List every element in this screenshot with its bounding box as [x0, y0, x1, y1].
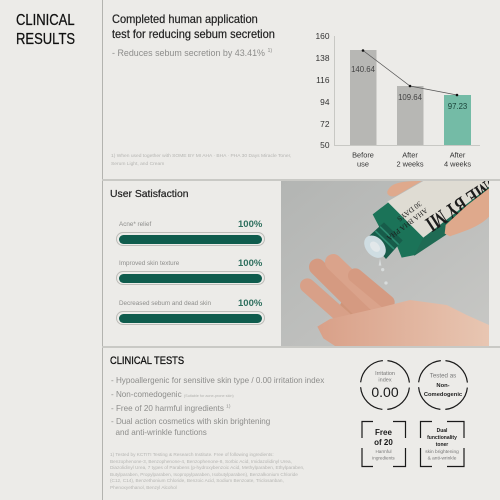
x axis labels: Before	[352, 150, 374, 160]
list: claims: - Hypoallergenic for sensitive skin type / 0.00 irritation index	[111, 376, 324, 385]
x axis labels: 4 weeks	[444, 160, 471, 168]
badge: free of 20: Free	[375, 428, 392, 437]
heading: human application test	[112, 13, 275, 41]
meter: decreased sebum	[116, 298, 265, 325]
x axis labels: 2 weeks	[396, 160, 424, 168]
meter: decreased sebum: Decreased sebum and dead skin	[119, 300, 211, 307]
title: clinical results: RESULTS	[16, 30, 75, 48]
meter: decreased sebum: 100%	[238, 298, 262, 309]
bar values: 109.64	[398, 93, 423, 102]
badge: free of 20: ingredients	[372, 456, 395, 460]
footnote: test details: Benzophenone-3, Benzophenone-4, Benzophenone-8, Sorbic Acid, Imidazolidinyl Urea,	[110, 458, 292, 464]
bars	[350, 50, 471, 145]
badge: dual functionality: skin brightening	[425, 449, 459, 455]
meter: improved skin texture	[116, 258, 265, 285]
badge: dual functionality: & anti-wrinkle	[428, 456, 457, 462]
badge: non-comedogenic: Tested as	[430, 372, 456, 380]
y axis labels: 116	[316, 75, 330, 85]
receiving hand	[307, 262, 489, 346]
vertical divider	[102, 0, 103, 500]
x axis labels: After	[402, 150, 418, 160]
list: claims: and anti-wrinkle functions	[115, 428, 207, 436]
y axis labels	[316, 31, 330, 150]
panel: sebum results	[111, 13, 291, 167]
holding hand	[387, 181, 489, 236]
droplets	[379, 258, 388, 285]
badge: irritation index	[360, 360, 410, 410]
badge: dual functionality: Dual	[437, 428, 448, 434]
panel: clinical tests	[110, 355, 324, 490]
footnote: test details: Phenoxyethanol, Benzyl Alcohol	[110, 484, 177, 490]
title: clinical results	[16, 12, 75, 48]
y axis labels: 160	[316, 31, 330, 41]
footnote: test details: Diazolidinyl Urea, 7 types of Parabens (p-hydroxybenzoic Acid, Methylparaben, Ethylparaben,	[110, 465, 304, 470]
label text	[385, 165, 500, 243]
badge: irritation index: index	[378, 378, 392, 384]
badge: non-comedogenic: Non-	[436, 383, 450, 389]
bar chart: sebum secretion	[316, 31, 480, 168]
footnote: test details: (C12, C14), Benzethonium Chloride, Benzoic Acid, Sodium Benzoate, Triclosanban,	[110, 478, 284, 483]
x axis labels: use	[357, 160, 369, 168]
panel: user satisfaction	[110, 189, 265, 325]
footnote: product set: Serum Light, and Cream	[111, 162, 164, 167]
trend line	[362, 49, 458, 96]
bottle	[360, 165, 500, 262]
heading: user satisfaction: User Satisfaction	[110, 189, 189, 200]
footnote: product set	[111, 154, 291, 167]
meter: acne relief: Acne* relief	[119, 221, 151, 228]
list: claims: - Free of 20 harmful ingredients 1)	[111, 404, 230, 413]
y axis labels: 50	[320, 140, 330, 150]
x axis labels	[352, 150, 471, 168]
heading: clinical tests: CLINICAL TESTS	[110, 355, 184, 367]
text: sebum reduction: - Reduces sebum secretion by 43.41% 1)	[112, 47, 272, 58]
meter: improved skin texture: Improved skin texture	[119, 260, 179, 267]
y axis labels: 94	[320, 97, 330, 107]
horizontal divider	[102, 346, 500, 348]
list: claims: - Dual action cosmetics with skin brightening	[111, 417, 270, 426]
x axis labels: After	[450, 150, 466, 160]
y axis labels: 138	[316, 53, 330, 63]
footnote: test details: 1) Tested by KCTITI Testing & Research Institute. Free of following ingredients:	[110, 452, 274, 457]
badge: free of 20: of 20	[374, 438, 393, 447]
footnote: test details	[110, 452, 304, 490]
badge: free of 20: Harmful	[375, 449, 392, 454]
bar values	[351, 65, 467, 111]
badge: non-comedogenic	[418, 360, 468, 410]
footnote: product set: 1) When used together with SOME BY MI AHA · BHA · PHA 30 Days Miracle Toner,	[111, 154, 291, 159]
label text: 30 DAYS	[395, 199, 424, 224]
axis	[334, 36, 480, 146]
list: claims: - Non-comedogenic (Suitable for acne-prone skin)	[111, 390, 234, 399]
badge: irritation index: Irritation	[375, 371, 395, 377]
badge: non-comedogenic: Comedogenic	[424, 392, 463, 398]
footnote: test details: Butylparaben, Propylparaben, Isopropylparaben, Isobutylparaben), Benzalkonium Chloride	[110, 472, 298, 476]
heading: human application test: Completed human application	[112, 13, 258, 26]
title: clinical results: CLINICAL	[16, 12, 75, 29]
label text: AHA BHA PHA	[385, 206, 430, 243]
list: claims	[111, 376, 324, 436]
bar values: 97.23	[448, 102, 467, 111]
badge: irritation index: 0.00	[371, 384, 399, 400]
badge: dual functionality: toner	[436, 442, 448, 448]
meter: acne relief	[116, 219, 265, 246]
meter: improved skin texture: 100%	[238, 258, 262, 269]
badge: dual functionality	[420, 420, 465, 468]
badge: free of 20	[361, 420, 406, 468]
y axis labels: 72	[320, 119, 330, 129]
photo: toner poured into hand	[281, 181, 489, 346]
heading: human application test: test for reducing sebum secretion	[112, 28, 275, 41]
badge: dual functionality: functionality	[427, 435, 457, 441]
bar values: 140.64	[351, 65, 376, 74]
horizontal divider	[102, 179, 500, 181]
meter: acne relief: 100%	[238, 219, 262, 230]
